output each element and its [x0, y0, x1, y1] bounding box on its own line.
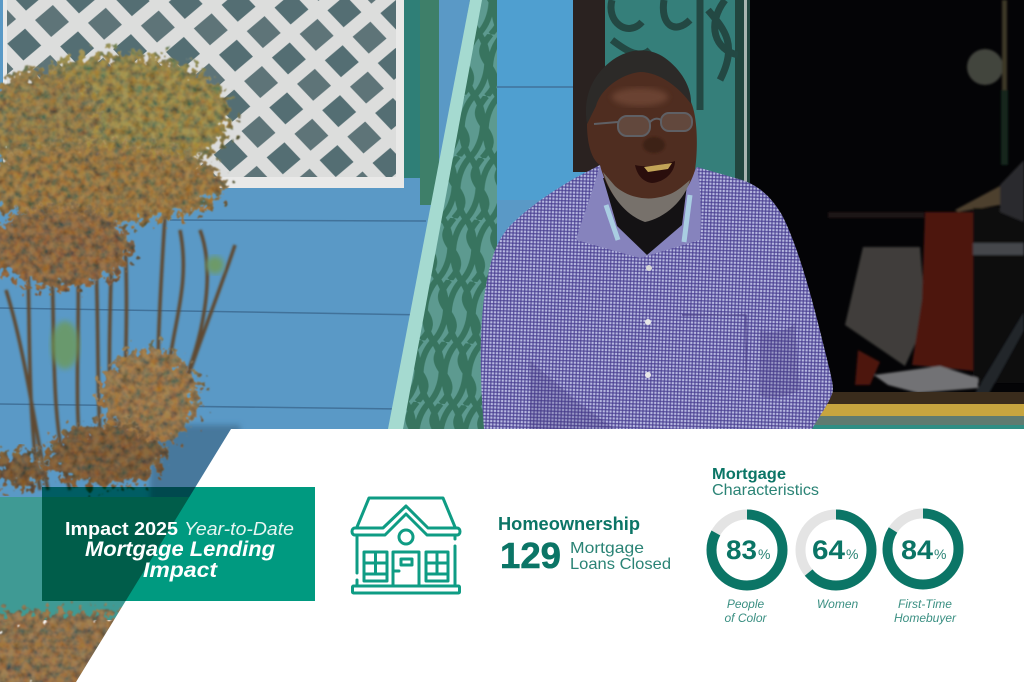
mortgage characteristics heading: [712, 466, 819, 499]
loans label: Mortgage: [570, 540, 644, 557]
icon: house: [352, 498, 460, 593]
donut: first-time homebuyer 84%: First-Time: [898, 597, 952, 611]
donut: first-time homebuyer 84%: [888, 514, 958, 625]
donut: people of color 83%: [712, 514, 782, 625]
title banner: [42, 487, 315, 601]
homeownership stat: [498, 514, 671, 576]
climbing bush: [0, 53, 235, 490]
donut: first-time homebuyer 84%: 84: [901, 535, 933, 565]
knit cap: [586, 50, 691, 124]
nose: [643, 137, 665, 153]
fallen leaves: [0, 612, 150, 682]
grey beard: [603, 172, 690, 222]
shirt: [481, 165, 833, 429]
title line 1: Year-to-Date: [184, 519, 294, 539]
donut: first-time homebuyer 84%: %: [934, 546, 946, 562]
donut: women 64%: 64: [812, 535, 845, 565]
black undershirt: [603, 178, 687, 255]
white lattice panel: [3, 0, 404, 188]
loans label: Loans Closed: [570, 556, 671, 573]
lower wall shade: [150, 425, 240, 505]
homeownership heading: Homeownership: [498, 514, 640, 534]
donut: people of color 83%: People: [727, 597, 765, 611]
donut: people of color 83%: of Color: [724, 611, 768, 625]
mint handrail: [388, 0, 482, 429]
title line 3: Impact: [143, 559, 218, 582]
mortgage characteristics heading: Mortgage: [712, 466, 786, 483]
title line 1: Impact 2025: [65, 519, 178, 539]
donut: people of color 83%: 83: [726, 535, 757, 565]
donut: women 64%: Women: [817, 597, 858, 611]
face: [587, 70, 697, 217]
iron security gate: [573, 0, 750, 190]
loans label: [570, 540, 671, 573]
green iron stair lattice: [395, 0, 497, 429]
donut: people of color 83%: %: [758, 546, 770, 562]
white diagonal panel: [76, 429, 1024, 682]
mouth: [635, 161, 675, 183]
green shutter and post: [404, 0, 439, 205]
number of loans: 129: [500, 535, 561, 576]
title line 2: Mortgage Lending: [85, 538, 275, 561]
forehead highlight: [612, 88, 668, 106]
teal foundation: [0, 497, 205, 620]
glasses: [594, 113, 692, 136]
donut: women 64%: [800, 514, 872, 611]
doorway interior: [745, 0, 1024, 429]
blue siding wall: [0, 0, 600, 500]
donut: women 64%: %: [846, 546, 858, 562]
title line 1: [65, 519, 294, 539]
donut: first-time homebuyer 84%: Homebuyer: [894, 611, 957, 625]
mortgage characteristics heading: Characteristics: [712, 482, 819, 499]
man: [481, 50, 833, 429]
